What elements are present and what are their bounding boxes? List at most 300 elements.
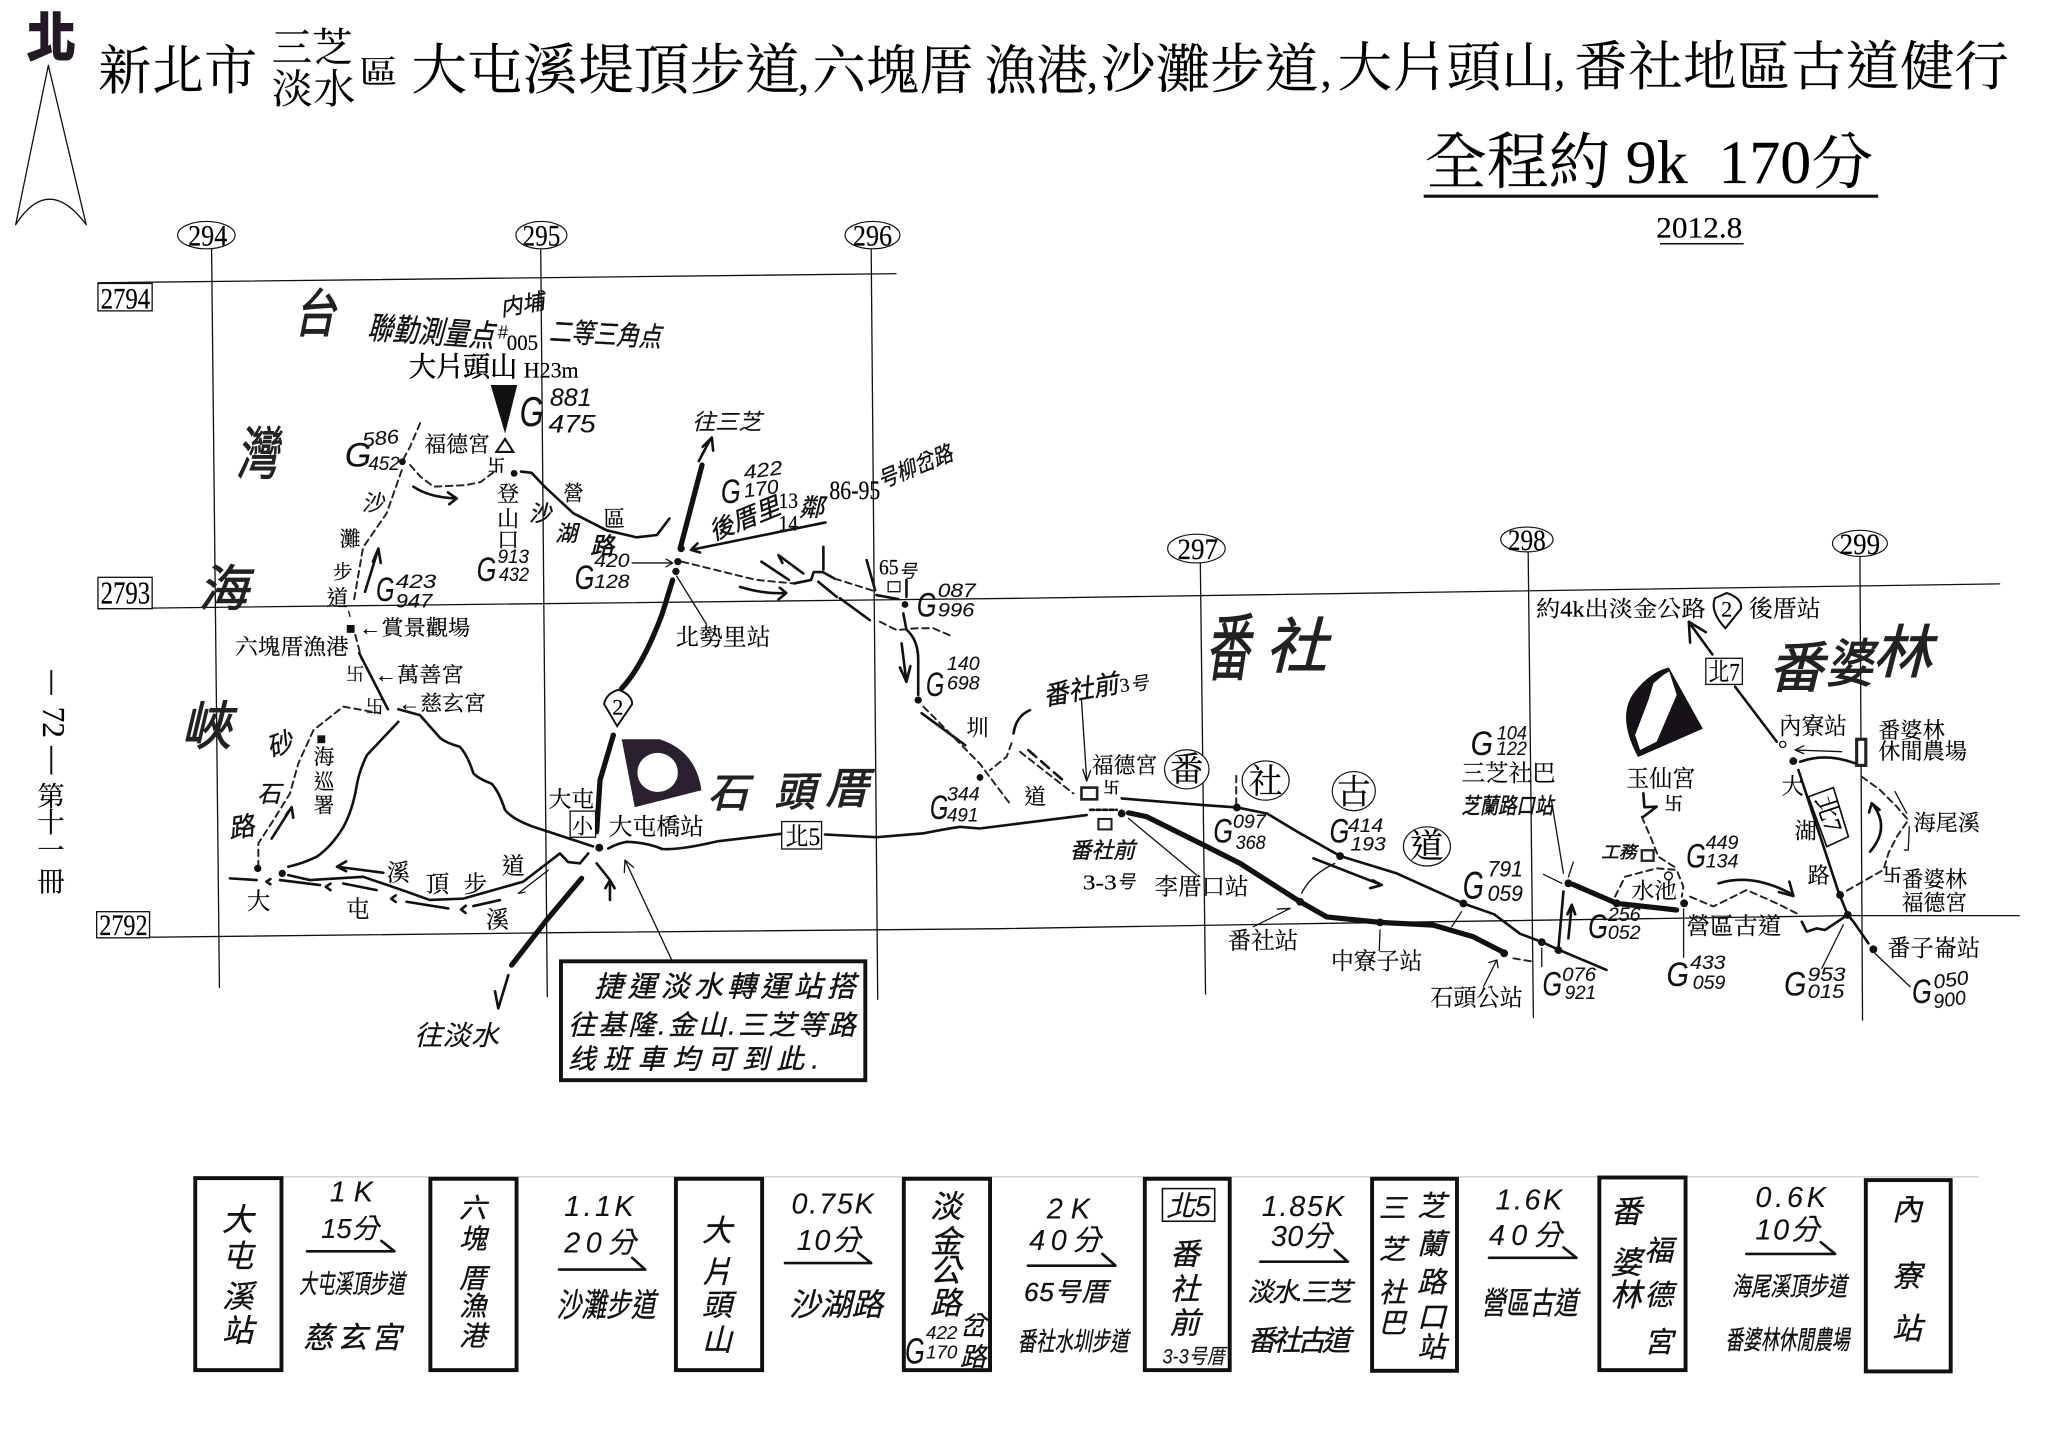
- title: 六塊厝: [812, 41, 973, 101]
- segment: 1K 15 min: 15分: [321, 1213, 382, 1244]
- G grid references east: 015: [1808, 981, 1844, 1003]
- sea label: Taiwan Strait: 峽: [182, 699, 238, 757]
- stop: Danjin Road: 金: [930, 1225, 965, 1260]
- G grid references east: 433: [1690, 952, 1726, 974]
- stop: Datun creek station: 站: [222, 1313, 258, 1348]
- G grid references east: 059: [1693, 972, 1725, 994]
- page label: 十: [37, 808, 65, 838]
- route: Fanshe old trail: 番社前: [1070, 838, 1138, 863]
- route: Datun creek embankment trail: [230, 853, 588, 933]
- coast place labels: ←萬善宮: [375, 663, 464, 687]
- G grid references east: G: [1667, 956, 1689, 994]
- title: ,: [1087, 48, 1098, 98]
- coast place labels: 巡: [313, 770, 334, 794]
- G grid references west: G: [575, 559, 594, 597]
- stop: Liukuaicuo fishing port: 六: [459, 1192, 489, 1223]
- route: coast trails and Shahu Road: [258, 423, 669, 867]
- segment: 1.1K 20 min: 沙灘步道: [556, 1287, 659, 1324]
- grid row labels: 2792: [99, 909, 148, 942]
- G grid references east: 122: [1497, 738, 1527, 760]
- G grid references west: 586: [361, 426, 400, 452]
- northwest labels: 卐: [488, 457, 505, 476]
- route: Datun creek embankment trail: 步: [464, 871, 487, 898]
- route: Beiqi road and exit to Houcuo: 休閒農場: [1878, 739, 1967, 764]
- Houcuo village note: 鄰: [799, 495, 828, 522]
- circled labels: Fanshe old trail: 道: [1410, 828, 1444, 866]
- segment: 1.1K 20 min: 1.1K: [564, 1191, 635, 1223]
- G grid references east: 050: [1932, 967, 1970, 994]
- route: Beiqi road and exit to Houcuo: 約4k出淡金公路: [1536, 597, 1706, 622]
- northwest labels: 山: [497, 506, 519, 531]
- route: Datun creek embankment trail: 屯: [346, 896, 370, 923]
- stop: Liukuaicuo fishing port: 塊: [459, 1224, 490, 1255]
- stop: Sanzhi community bus, Zhilan Road junction: 社: [1379, 1277, 1409, 1308]
- title: 番社地區古道健行: [1574, 37, 2009, 97]
- stop: Fanshe Qian 3-3: 北5: [1166, 1191, 1212, 1223]
- route: Beiqi road and exit to Houcuo: 番婆林: [1878, 718, 1945, 743]
- page label: 一: [37, 835, 65, 865]
- stop: Danjin Road: 路: [930, 1286, 964, 1321]
- G grid references east: G: [1463, 865, 1484, 908]
- Houcuo village note: 14: [778, 510, 798, 535]
- Houcuo village note: 13: [778, 488, 798, 513]
- G grid references east: G: [1471, 725, 1493, 763]
- place labels: Fanshe and Fanpolin: 番: [1206, 609, 1254, 690]
- peak: Dapiantou Shan: H23m: [524, 357, 579, 382]
- title: 淡水: [272, 67, 355, 112]
- northwest labels: 營: [563, 481, 584, 505]
- G grid references west: 432: [499, 564, 529, 586]
- G grid references east: 368: [1236, 832, 1266, 854]
- title: ,: [1554, 45, 1565, 95]
- G grid references east: G: [1543, 965, 1562, 1003]
- segment: 0.6K 10 min: 番婆林休閒農場: [1725, 1325, 1851, 1355]
- segment: 1.1K 20 min: 20分: [563, 1228, 639, 1260]
- route: Beiqi road and exit to Houcuo: 大: [1782, 774, 1804, 799]
- title: 大片頭山: [1337, 38, 1556, 98]
- route: Fanshe old trail: [1070, 753, 1607, 1012]
- stop: Danjin Road: [904, 1179, 990, 1372]
- stop: Dapiantou Shan: 大: [702, 1215, 735, 1248]
- G grid references east: 414: [1348, 815, 1383, 837]
- icon: north arrow: 北: [27, 10, 76, 68]
- route: camp old trail: 營區古道: [1686, 913, 1782, 940]
- stop: Danjin Road: 422: [926, 1322, 957, 1343]
- circled labels: Fanshe old trail: 番: [1170, 752, 1204, 789]
- segment: 1K 15 min: 大屯溪頂步道: [299, 1269, 408, 1299]
- Houcuo village note: 86-95: [829, 476, 880, 505]
- stop: Neiliao station: [1866, 1180, 1951, 1371]
- stop: Danjin Road: 路: [960, 1342, 988, 1372]
- route: camp old trail: [1462, 760, 1845, 957]
- coast place labels: ←慈玄宮: [398, 692, 486, 716]
- route: Datun creek embankment trail: 道: [502, 853, 525, 880]
- coast place labels: 署: [313, 793, 334, 817]
- page label: [36, 670, 71, 897]
- stop: Fanpolin Fude temple: 番: [1610, 1195, 1644, 1230]
- route: Beiqi road and exit to Houcuo: 內寮站: [1779, 713, 1847, 740]
- route: Datun creek embankment trail: 大: [247, 888, 270, 915]
- route: camp old trail: 玉仙宮: [1626, 765, 1695, 792]
- route: Beiqi road and exit to Houcuo: 路: [1808, 863, 1830, 888]
- G grid references east: [1213, 722, 1970, 1013]
- G grid references west: 422: [742, 457, 784, 484]
- G grid references west: G: [721, 473, 741, 511]
- G grid references west: 913: [498, 546, 529, 568]
- G grid references west: 344: [947, 784, 980, 806]
- page label: 72: [36, 707, 71, 738]
- coast place labels: 海: [313, 745, 334, 769]
- segment: 2K 40 min: 2 K: [1046, 1194, 1092, 1226]
- segment: 0.75K 10 min: [785, 1188, 886, 1322]
- G grid references west: G: [345, 436, 371, 474]
- route: Datun creek embankment trail: 溪: [486, 906, 509, 933]
- G grid references east: 104: [1497, 722, 1527, 744]
- grid column labels: 298: [1508, 524, 1546, 557]
- survey point note: 内埔: [498, 288, 550, 321]
- route: Fanshe irrigation trail: 番社前: [1041, 668, 1124, 711]
- stop: Sanzhi community bus, Zhilan Road junction: 口: [1417, 1302, 1448, 1334]
- route: Beiqi road and exit to Houcuo: 番子崙站: [1887, 935, 1980, 962]
- route: Beiqi road and exit to Houcuo: [1536, 593, 1980, 987]
- route: Beiqi road and exit to Houcuo: 2: [1721, 597, 1732, 622]
- G grid references east: G: [1213, 812, 1233, 850]
- title: 大屯溪堤頂步道: [411, 40, 801, 101]
- coast place labels: 砂: [262, 725, 299, 763]
- stop: Danjin Road: 170: [926, 1341, 957, 1362]
- route: Beiqi road and exit to Houcuo: 海尾溪: [1913, 811, 1980, 836]
- segment: 2K 40 min: 65号厝: [1024, 1277, 1111, 1307]
- place labels: Fanshe and Fanpolin: 婆: [1826, 636, 1879, 694]
- survey point note: 005: [507, 330, 538, 355]
- northwest labels: 福德宮: [424, 432, 490, 457]
- stop: Fanshe Qian 3-3: 前: [1170, 1308, 1204, 1341]
- Houcuo village note: 後厝里: [705, 493, 786, 546]
- route: Fanshe old trail: 卐: [1104, 779, 1119, 797]
- segment: 1.6K 40 min: [1481, 1184, 1581, 1321]
- G grid references east: 449: [1706, 832, 1739, 854]
- route: Fanshe irrigation trail: 3: [1118, 675, 1131, 697]
- stop: Danjin Road: 岔: [960, 1311, 990, 1341]
- route: Danjin Road no. 2: 往淡水: [414, 1020, 501, 1051]
- G grid references east: 921: [1565, 982, 1596, 1004]
- stop: Sanzhi community bus, Zhilan Road junction: 站: [1417, 1332, 1450, 1364]
- title: ,: [1320, 46, 1332, 96]
- stop: Liukuaicuo fishing port: 漁: [459, 1290, 488, 1321]
- northwest labels: 灘: [340, 527, 361, 551]
- G grid references east: 900: [1932, 987, 1968, 1013]
- northwest labels: 沙: [529, 501, 553, 526]
- segment: 1.85K 30 min: 番社古道: [1247, 1326, 1355, 1358]
- stop: Fanpolin Fude temple: 宮: [1644, 1327, 1676, 1359]
- callout: MRT Tamsui transfer station: 捷運淡水轉運站搭: [594, 972, 860, 1004]
- stop: Dapiantou Shan: 山: [702, 1325, 734, 1358]
- stop: Sanzhi community bus, Zhilan Road junction: 巴: [1379, 1307, 1408, 1338]
- G grid references east: 791: [1488, 856, 1523, 881]
- route: Beiqi road and exit to Houcuo: 北7: [1809, 792, 1846, 836]
- G grid references east: G: [1330, 812, 1349, 850]
- route: Fanshe irrigation trail: 圳: [967, 715, 989, 740]
- segment: 1.6K 40 min: 40分: [1489, 1220, 1565, 1252]
- stop: Danjin Road: 淡: [930, 1189, 965, 1224]
- G grid references east: 134: [1706, 850, 1739, 872]
- segment: 1.85K 30 min: 1.85K: [1262, 1191, 1346, 1223]
- sea label: Taiwan Strait: 台: [294, 286, 337, 344]
- segment: 2K 40 min: 40分: [1029, 1225, 1104, 1257]
- G grid references west: 698: [947, 673, 980, 695]
- route: Fanshe irrigation trail: 号: [1129, 671, 1151, 695]
- sea label: Taiwan Strait: 海: [199, 561, 255, 617]
- route: Beiqi road and exit to Houcuo: 卐: [1883, 866, 1902, 886]
- G grid references east: 059: [1488, 881, 1523, 906]
- northwest labels: 口: [497, 527, 519, 552]
- G grid references west: 996: [938, 600, 974, 622]
- route: camp old trail: 芝蘭路口站: [1462, 794, 1555, 819]
- segment: 0.75K 10 min: 10分: [797, 1225, 864, 1257]
- peak: Dapiantou Shan: [409, 352, 579, 452]
- stop: Datun creek station: 屯: [222, 1239, 256, 1274]
- stop: Datun creek station: [195, 1178, 281, 1370]
- G grid references east: 076: [1562, 964, 1596, 986]
- coast place labels: 卐: [346, 665, 364, 685]
- place label: Shitoucuo: 石: [708, 770, 754, 816]
- stop: Liukuaicuo fishing port: [430, 1179, 517, 1370]
- page label: 第: [37, 782, 65, 812]
- page label: 冊: [37, 867, 65, 897]
- G grid references west: G: [477, 551, 496, 589]
- northwest labels: 步: [333, 562, 353, 584]
- callout: MRT Tamsui transfer station: 线班車均可到此.: [568, 1043, 819, 1074]
- title: ,: [798, 49, 809, 99]
- segment: 0.6K 10 min: 0.6K: [1755, 1182, 1828, 1214]
- G grid references west: 881: [550, 385, 592, 412]
- survey point note: #: [498, 321, 509, 342]
- grid column labels: 299: [1840, 528, 1880, 561]
- Houcuo village note: [691, 440, 958, 553]
- icon: north arrow: [16, 10, 86, 225]
- stop: Fanshe Qian 3-3: [1145, 1179, 1230, 1370]
- coast place labels: 石: [257, 781, 284, 807]
- route: Fanshe old trail: 番社站: [1228, 927, 1298, 954]
- G grid references west: 128: [594, 571, 630, 593]
- G grid references east: G: [1588, 908, 1608, 946]
- northwest labels: 沙: [362, 491, 386, 516]
- route: Beiqi road and exit to Houcuo: 湖: [1795, 819, 1817, 844]
- route: Fanshe old trail: 石頭公站: [1430, 985, 1523, 1012]
- place labels: Fanshe and Fanpolin: [1206, 609, 1937, 699]
- segment: 1.85K 30 min: [1247, 1191, 1356, 1358]
- stop: Datun creek station: 大: [222, 1202, 256, 1237]
- survey point note: 聯勤測量点: [367, 310, 498, 354]
- G grid references west: 423: [396, 571, 436, 593]
- segment: 0.75K 10 min: 0.75K: [792, 1188, 876, 1220]
- grid column labels: 296: [853, 220, 892, 253]
- stop: Fanpolin Fude temple: 婆: [1610, 1245, 1646, 1280]
- grid column labels: [178, 220, 1887, 566]
- sea label: Taiwan Strait: 灣: [236, 423, 283, 487]
- stop: Datun creek station: 溪: [222, 1279, 257, 1314]
- stop: Sanzhi community bus, Zhilan Road junction: 三: [1379, 1192, 1409, 1223]
- grid column labels: 297: [1177, 533, 1218, 566]
- place labels: Fanshe and Fanpolin: 林: [1873, 622, 1937, 686]
- coast place labels: 卐: [366, 697, 384, 717]
- place labels: Fanshe and Fanpolin: 番: [1768, 637, 1829, 699]
- stop: Fanshe Qian 3-3: 社: [1170, 1274, 1203, 1307]
- G grid references east: 097: [1233, 811, 1267, 833]
- G grid references west: G: [520, 388, 543, 435]
- northwest labels: [327, 432, 626, 611]
- northwest labels: 路: [590, 533, 616, 559]
- segment: 1K 15 min: [299, 1177, 408, 1355]
- route: Datun creek embankment trail: 頂: [426, 871, 450, 898]
- coast place labels: 路: [226, 810, 258, 844]
- G grid references west: 140: [947, 653, 980, 675]
- survey point note: 二等三角点: [548, 316, 664, 353]
- G grid references west: 420: [594, 550, 630, 572]
- Datun bridge labels and North 5 road: 小: [572, 814, 594, 838]
- stop: Liukuaicuo fishing port: 厝: [459, 1263, 491, 1294]
- route: Danjin Road no. 2: 2: [612, 694, 623, 719]
- stop: Liukuaicuo fishing port: 港: [459, 1320, 490, 1351]
- segment: 1.6K 40 min: 1.6K: [1496, 1184, 1564, 1216]
- route: Beiqi road and exit to Houcuo: 福德宮: [1902, 890, 1967, 915]
- icon: Shitoucuo map sheet symbol: [622, 739, 701, 807]
- circled labels: Fanshe old trail: 古: [1337, 773, 1371, 811]
- circled labels: Fanshe old trail: [1165, 750, 1450, 866]
- G grid references west: 947: [396, 590, 434, 612]
- route: camp old trail: 水池: [1631, 879, 1677, 904]
- Datun bridge labels and North 5 road: 大屯橋站: [609, 814, 704, 841]
- northwest labels: 登: [497, 482, 519, 507]
- northwest labels: 湖: [555, 521, 581, 546]
- stop: Sanzhi community bus, Zhilan Road junction: 路: [1417, 1267, 1448, 1299]
- stop: Fanpolin Fude temple: 德: [1644, 1280, 1677, 1312]
- G grid references west: G: [376, 571, 394, 609]
- peak: Dapiantou Shan: 大片頭山: [409, 352, 517, 382]
- segment: 1.6K 40 min: 營區古道: [1481, 1286, 1581, 1321]
- G grid references east: 953: [1808, 964, 1846, 986]
- G grid references west: [345, 385, 980, 827]
- sea label: Taiwan Strait: [182, 286, 337, 757]
- segment: 1.85K 30 min: 淡水.三芝: [1247, 1277, 1356, 1307]
- G grid references west: 452: [368, 453, 400, 475]
- title: [98, 25, 2009, 112]
- coast place labels: 六塊厝漁港: [235, 634, 349, 659]
- map grid: [98, 249, 2019, 1020]
- segment: 0.75K 10 min: 沙湖路: [789, 1287, 886, 1322]
- segment: 0.6K 10 min: 10分: [1755, 1215, 1823, 1247]
- segment: 2K 40 min: 番社水圳步道: [1017, 1327, 1131, 1357]
- stop: Sanzhi community bus, Zhilan Road junction: 蘭: [1417, 1229, 1450, 1261]
- segment: 0.6K 10 min: 海尾溪頂步道: [1732, 1272, 1850, 1302]
- route: camp old trail: 三芝社巴: [1462, 760, 1556, 787]
- route: Danjin Road no. 2: 北勢里站: [675, 624, 771, 651]
- route: Datun creek embankment trail: 溪: [387, 859, 410, 886]
- circled labels: Fanshe old trail: 社: [1249, 763, 1283, 801]
- G grid references west: 475: [549, 411, 596, 438]
- segment: 2K 40 min: [1017, 1194, 1131, 1357]
- route: Danjin Road no. 2: 往三芝: [692, 410, 765, 435]
- grid column labels: 294: [188, 220, 227, 253]
- route: Fanshe old trail: 李厝口站: [1155, 874, 1249, 901]
- route: camp old trail: 工務: [1601, 843, 1640, 862]
- place label: Shitoucuo: 頭: [775, 769, 822, 815]
- segment: 1.85K 30 min: 30分: [1271, 1221, 1336, 1253]
- Datun bridge labels and North 5 road: [549, 787, 1087, 851]
- G grid references east: 193: [1351, 833, 1386, 855]
- Houcuo village note: 号柳岔路: [874, 440, 958, 493]
- route: Danjin Road no. 2: [414, 410, 771, 1051]
- route summary strip: [195, 1176, 1979, 1372]
- stop: Neiliao station: 站: [1892, 1313, 1926, 1346]
- stop: Neiliao station: 內: [1892, 1194, 1924, 1227]
- stop: Dapiantou Shan: [676, 1179, 762, 1370]
- icon: second map sheet symbol: [1627, 668, 1702, 756]
- route: Fanshe old trail: 福德宮: [1092, 753, 1157, 778]
- place labels: Fanshe and Fanpolin: 社: [1266, 613, 1332, 680]
- callout: MRT Tamsui transfer station: [561, 860, 865, 1080]
- stop: Danjin Road: 公: [930, 1253, 964, 1288]
- stop: Danjin Road: G: [905, 1331, 925, 1372]
- route: Fanshe irrigation trail: 道: [1024, 785, 1046, 810]
- total distance and time: 全程約 9k 170分: [1425, 129, 1873, 197]
- coast place labels: ←賞景觀場: [359, 616, 470, 640]
- segment: 1K 15 min: 1 K: [330, 1177, 375, 1209]
- coast place labels: [226, 616, 486, 844]
- stop: Fanshe Qian 3-3: 3-3号厝: [1162, 1346, 1228, 1369]
- G grid references west: 170: [742, 476, 780, 503]
- grid column labels: 295: [522, 220, 560, 253]
- northwest labels: 道: [327, 586, 349, 611]
- place label: Shitoucuo: 厝: [825, 765, 874, 813]
- title: 漁港: [985, 41, 1088, 101]
- stop: Fanpolin Fude temple: 福: [1644, 1235, 1677, 1267]
- G grid references east: G: [1784, 965, 1806, 1003]
- stop: Sanzhi community bus, Zhilan Road junction: 芝: [1379, 1234, 1410, 1265]
- northwest labels: 區: [603, 506, 626, 531]
- stop: Fanshe Qian 3-3: 番: [1170, 1238, 1203, 1271]
- segment: 0.6K 10 min: [1725, 1182, 1851, 1355]
- G grid references east: G: [1686, 837, 1706, 875]
- segment: 1.1K 20 min: [556, 1191, 659, 1324]
- route: camp old trail: 卐: [1665, 794, 1683, 814]
- G grid references west: 087: [938, 580, 977, 602]
- Datun bridge labels and North 5 road: 大屯: [549, 787, 594, 812]
- title: 沙灘步道: [1101, 40, 1319, 100]
- stop: Neiliao station: 寮: [1892, 1261, 1926, 1294]
- grid row labels: 2793: [101, 575, 150, 610]
- G grid references west: G: [926, 666, 944, 704]
- place label: Shitoucuo: [708, 765, 874, 816]
- route: Fanshe irrigation trail: 号: [899, 560, 919, 581]
- stop: Fanpolin Fude temple: 林: [1610, 1278, 1645, 1313]
- title: 區: [359, 54, 398, 89]
- route: Fanshe irrigation trail: [682, 547, 1151, 829]
- route: Fanshe old trail: 中寮子站: [1331, 948, 1422, 975]
- stop: Dapiantou Shan: 片: [702, 1257, 732, 1290]
- G grid references east: G: [1912, 973, 1932, 1011]
- title: 新北市: [98, 41, 257, 101]
- route: Beiqi road and exit to Houcuo: 北7: [1708, 660, 1740, 687]
- segment: 1K 15 min: 慈玄宮: [303, 1322, 405, 1355]
- G grid references west: 491: [947, 805, 978, 827]
- callout: MRT Tamsui transfer station: 往基隆.金山.三芝等路: [568, 1009, 858, 1040]
- stop: Fanpolin Fude temple: [1599, 1177, 1686, 1370]
- G grid references east: 256: [1607, 904, 1641, 926]
- grid row labels: [97, 282, 152, 942]
- title: 三芝: [272, 25, 353, 70]
- grid row labels: 2794: [101, 282, 150, 315]
